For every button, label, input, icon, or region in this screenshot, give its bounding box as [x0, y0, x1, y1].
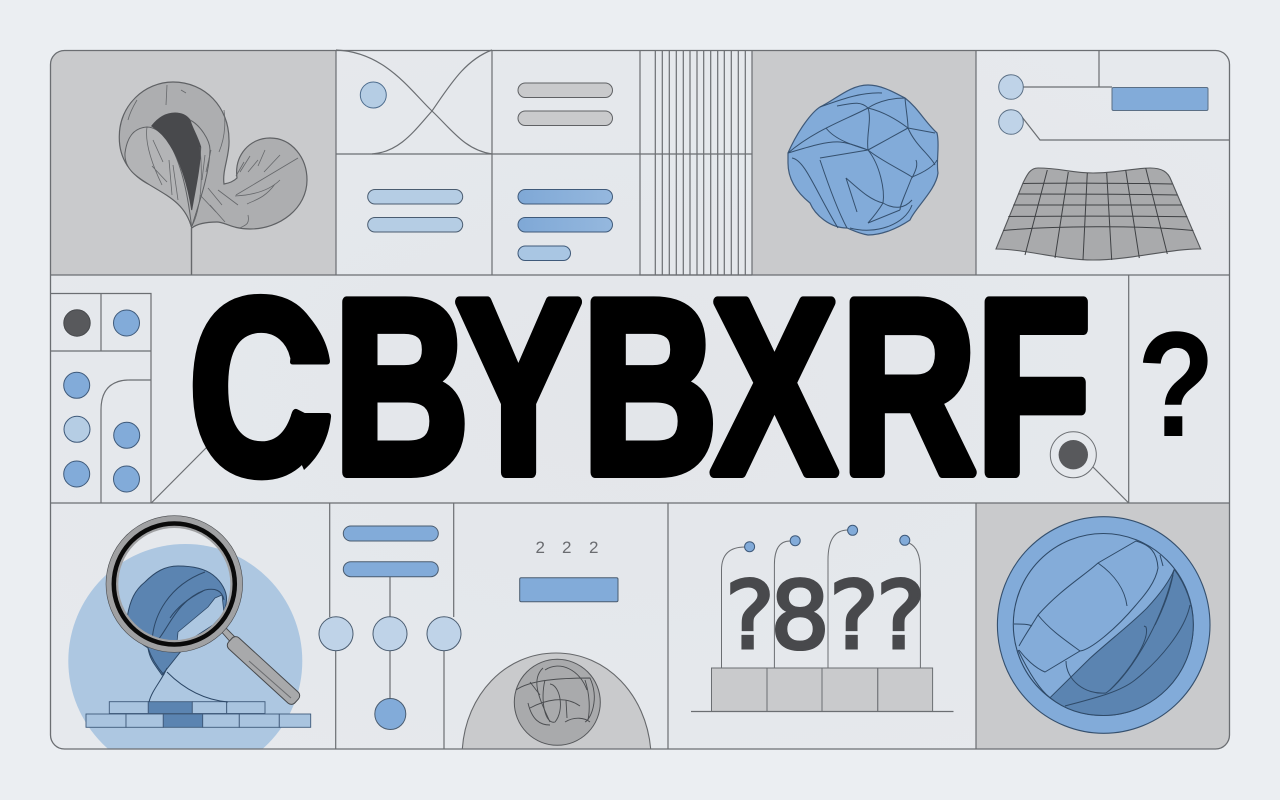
magnifier handle — [222, 628, 302, 706]
light blue disc — [68, 544, 302, 748]
question mark: ? — [1137, 301, 1215, 468]
question number row boxes — [712, 668, 933, 712]
dots panel — [64, 310, 140, 492]
panel: magnifier illustration — [68, 515, 312, 748]
bars: grey — [518, 83, 612, 126]
grey dome — [462, 653, 651, 749]
numbers 2 2 2: 2 2 2 — [536, 538, 598, 557]
?8?? characters: ?8?? — [725, 562, 926, 671]
circle in curve panel — [360, 82, 386, 108]
mesh surface — [996, 168, 1201, 260]
magnifier lens ring — [106, 516, 242, 652]
bars: blue — [518, 190, 612, 260]
stem — [190, 228, 192, 275]
panel: sphere — [976, 503, 1230, 749]
bars: light blue — [368, 190, 463, 232]
baseline — [691, 710, 954, 712]
blue box — [520, 578, 618, 602]
icon: ring dot — [1050, 432, 1096, 478]
pins — [722, 525, 920, 668]
bricks — [86, 702, 311, 727]
panel: blue blob — [752, 50, 976, 275]
tree diagram — [319, 526, 461, 730]
connector circles and blue label box — [999, 75, 1208, 134]
panel: seedling shape — [50, 50, 336, 275]
dark shell shape — [127, 566, 227, 675]
title: CBYBXRF — [189, 248, 1091, 526]
